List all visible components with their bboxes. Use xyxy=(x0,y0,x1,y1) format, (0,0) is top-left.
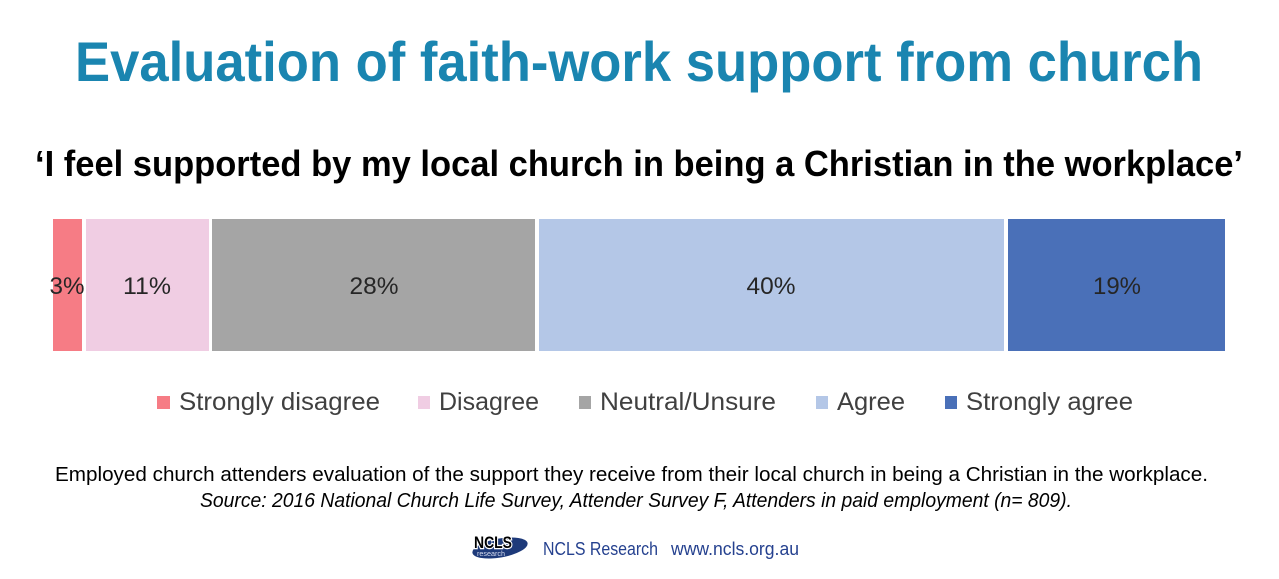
legend item: agree: Agree xyxy=(837,388,905,416)
segment: agree 40% xyxy=(539,219,1004,351)
segment: strongly disagree 3% xyxy=(50,219,84,351)
legend item: strongly agree: Strongly agree xyxy=(966,388,1133,416)
segment: strongly agree 19%: 19% xyxy=(1093,273,1141,300)
title: Evaluation of faith-work support from church xyxy=(75,30,1203,93)
footer: organisation name: NCLS Research xyxy=(543,539,658,559)
segment: strongly disagree 3%: 3% xyxy=(50,273,84,300)
segment: strongly agree 19% xyxy=(1008,219,1225,351)
description text: Employed church attenders evaluation of the support they receive from their local church in being a Christian in the workplace. xyxy=(55,464,1208,486)
segment: neutral/unsure 28%: 28% xyxy=(350,273,398,300)
source note: Source: 2016 National Church Life Survey, Attender Survey F, Attenders in paid employment (n= 809). xyxy=(200,490,1072,512)
legend item: disagree: Disagree xyxy=(439,388,539,416)
footer: website: www.ncls.org.au xyxy=(670,539,799,559)
icon: NCLS logo: research xyxy=(477,551,505,558)
icon: NCLS logo: NCLS xyxy=(474,533,512,552)
subtitle: survey statement: ‘I feel supported by my local church in being a Christian in the workplace’ xyxy=(35,143,1243,184)
icon: NCLS logo xyxy=(471,533,529,562)
segment: disagree 11%: 11% xyxy=(123,273,171,300)
segment: agree 40%: 40% xyxy=(746,273,796,300)
segment: neutral/unsure 28% xyxy=(212,219,535,351)
stacked bar chart xyxy=(50,219,1225,351)
legend item: neutral/unsure: Neutral/Unsure xyxy=(600,388,776,416)
legend xyxy=(157,388,1133,416)
legend item: strongly disagree: Strongly disagree xyxy=(179,388,380,416)
segment: disagree 11% xyxy=(86,219,209,351)
